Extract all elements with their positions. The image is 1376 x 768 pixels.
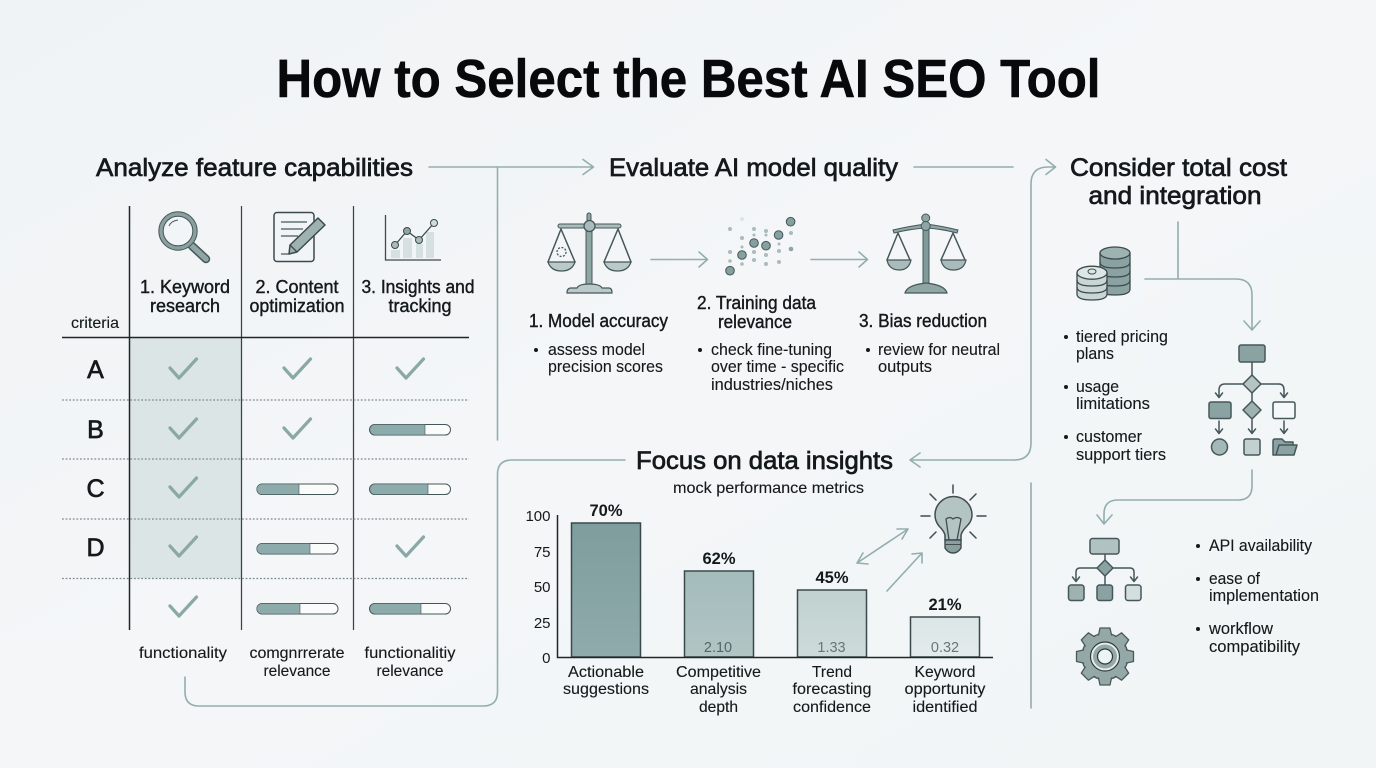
chart subtitle: mock performance metrics xyxy=(673,480,864,497)
row labels: A xyxy=(87,356,104,384)
integration bullet list: API availability xyxy=(1209,537,1313,555)
value labels xyxy=(589,502,962,614)
icon: light bulb xyxy=(921,485,986,553)
panel: consider total cost and integration xyxy=(1064,154,1319,685)
icon: decision flowchart xyxy=(1209,345,1297,455)
category labels: Actionable xyxy=(568,664,644,681)
integration bullet list: implementation xyxy=(1209,587,1319,605)
column headers: 3. Insights and xyxy=(362,277,474,297)
pricing bullet list: support tiers xyxy=(1076,446,1166,464)
arrow xyxy=(651,252,708,267)
step 2 text: check fine-tuning xyxy=(711,341,832,359)
icon: gear xyxy=(1076,628,1134,685)
progress bars xyxy=(257,424,450,614)
insight arrows xyxy=(857,529,922,591)
y axis labels: 75 xyxy=(534,544,550,561)
column headers: 1. Keyword xyxy=(140,277,230,297)
heading: evaluate AI model quality: Evaluate AI model quality xyxy=(609,154,899,182)
title: How to Select the Best AI SEO Tool xyxy=(276,50,1100,109)
row labels: B xyxy=(87,416,104,444)
step 3 text: review for neutral xyxy=(878,341,1000,359)
panel: focus on data insights xyxy=(525,447,993,716)
heading: focus on data insights: Focus on data insights xyxy=(636,447,893,475)
in-bar values: 2.10 xyxy=(704,640,732,656)
column headers: 2. Content xyxy=(255,277,339,297)
step 2 text: 2. Training data xyxy=(697,293,817,313)
category labels: suggestions xyxy=(563,681,649,698)
column footers xyxy=(139,645,456,680)
step 3 text xyxy=(859,311,1000,376)
value labels: 62% xyxy=(702,550,736,568)
category labels: analysis xyxy=(690,681,747,698)
row labels: C xyxy=(86,475,105,503)
step 1 text: assess model xyxy=(548,341,645,359)
y axis labels xyxy=(525,508,550,667)
step 2 text xyxy=(697,293,844,394)
column footers: comgnrrerate xyxy=(250,645,345,662)
integration bullet list: ease of xyxy=(1209,570,1260,588)
icon: coin stacks xyxy=(1077,247,1130,300)
category labels xyxy=(563,664,986,716)
column headers: research xyxy=(150,296,220,316)
icon: integration flowchart xyxy=(1068,538,1141,600)
value labels: 21% xyxy=(928,596,962,614)
step 3 text: outputs xyxy=(878,358,932,376)
arrow xyxy=(811,252,868,267)
heading: consider total cost and integration: and integration xyxy=(1088,182,1262,210)
column footers: functionality xyxy=(139,645,227,662)
column headers: optimization xyxy=(250,296,344,316)
pricing bullet list: plans xyxy=(1076,345,1114,363)
column headers xyxy=(71,277,474,332)
category labels: confidence xyxy=(793,699,871,716)
pricing bullet list: customer xyxy=(1076,428,1142,446)
axes xyxy=(558,515,993,658)
icon: data scatter xyxy=(726,217,795,275)
category labels: Keyword xyxy=(914,664,976,681)
category labels: identified xyxy=(912,699,978,716)
integration bullet list: compatibility xyxy=(1209,638,1301,656)
step 1 text: precision scores xyxy=(548,358,663,376)
step 2 text: over time - specific xyxy=(711,358,844,376)
y axis labels: 0 xyxy=(542,650,550,667)
step 2 text: industries/niches xyxy=(711,376,833,394)
pricing bullet list: limitations xyxy=(1076,395,1150,413)
y axis labels: 100 xyxy=(525,508,550,525)
step 2 text: relevance xyxy=(718,312,792,332)
in-bar values: 1.33 xyxy=(817,640,846,656)
highlighted first column xyxy=(130,338,242,578)
bars xyxy=(572,523,980,657)
category labels: forecasting xyxy=(792,681,872,698)
value labels: 70% xyxy=(589,502,623,520)
bar chart xyxy=(525,502,993,716)
connector arrows between sections xyxy=(185,160,1260,708)
integration bullet list xyxy=(1196,537,1319,656)
pricing bullet list: usage xyxy=(1076,378,1119,396)
icon: magnifying glass xyxy=(159,212,206,259)
row labels xyxy=(86,356,105,562)
y axis labels: 50 xyxy=(534,579,550,596)
panel: analyze feature capabilities xyxy=(62,154,474,680)
column footers: relevance xyxy=(264,663,331,680)
table grid xyxy=(62,206,469,630)
column footers: functionalitiy xyxy=(364,645,456,662)
pricing bullet list xyxy=(1064,328,1168,464)
integration bullet list: workflow xyxy=(1208,620,1273,638)
icon: balance scale xyxy=(548,213,631,293)
icon: tilted balance scale xyxy=(887,214,966,293)
heading: consider total cost and integration xyxy=(1070,154,1287,210)
step 1 text xyxy=(529,311,668,376)
in-bar values: 0.32 xyxy=(931,640,959,656)
heading: analyze feature capabilities: Analyze feature capabilities xyxy=(96,154,413,182)
check marks xyxy=(170,359,424,616)
icon: line chart xyxy=(386,215,441,260)
heading: consider total cost and integration: Consider total cost xyxy=(1070,154,1287,182)
category labels: Trend xyxy=(812,664,852,681)
category labels: Competitive xyxy=(676,664,761,681)
in-bar values xyxy=(704,640,959,656)
category labels: depth xyxy=(699,699,738,716)
column headers: criteria xyxy=(71,315,119,332)
column headers: tracking xyxy=(388,296,452,316)
pricing bullet list: tiered pricing xyxy=(1076,328,1168,346)
column footers: relevance xyxy=(376,663,444,680)
row labels: D xyxy=(86,534,105,562)
icon: document and pencil xyxy=(274,212,325,262)
value labels: 45% xyxy=(815,569,849,587)
y axis labels: 25 xyxy=(534,615,550,632)
step 3 text: 3. Bias reduction xyxy=(859,311,987,331)
category labels: opportunity xyxy=(904,681,986,698)
step 1 text: 1. Model accuracy xyxy=(529,311,668,331)
panel: evaluate AI model quality xyxy=(529,154,1000,394)
